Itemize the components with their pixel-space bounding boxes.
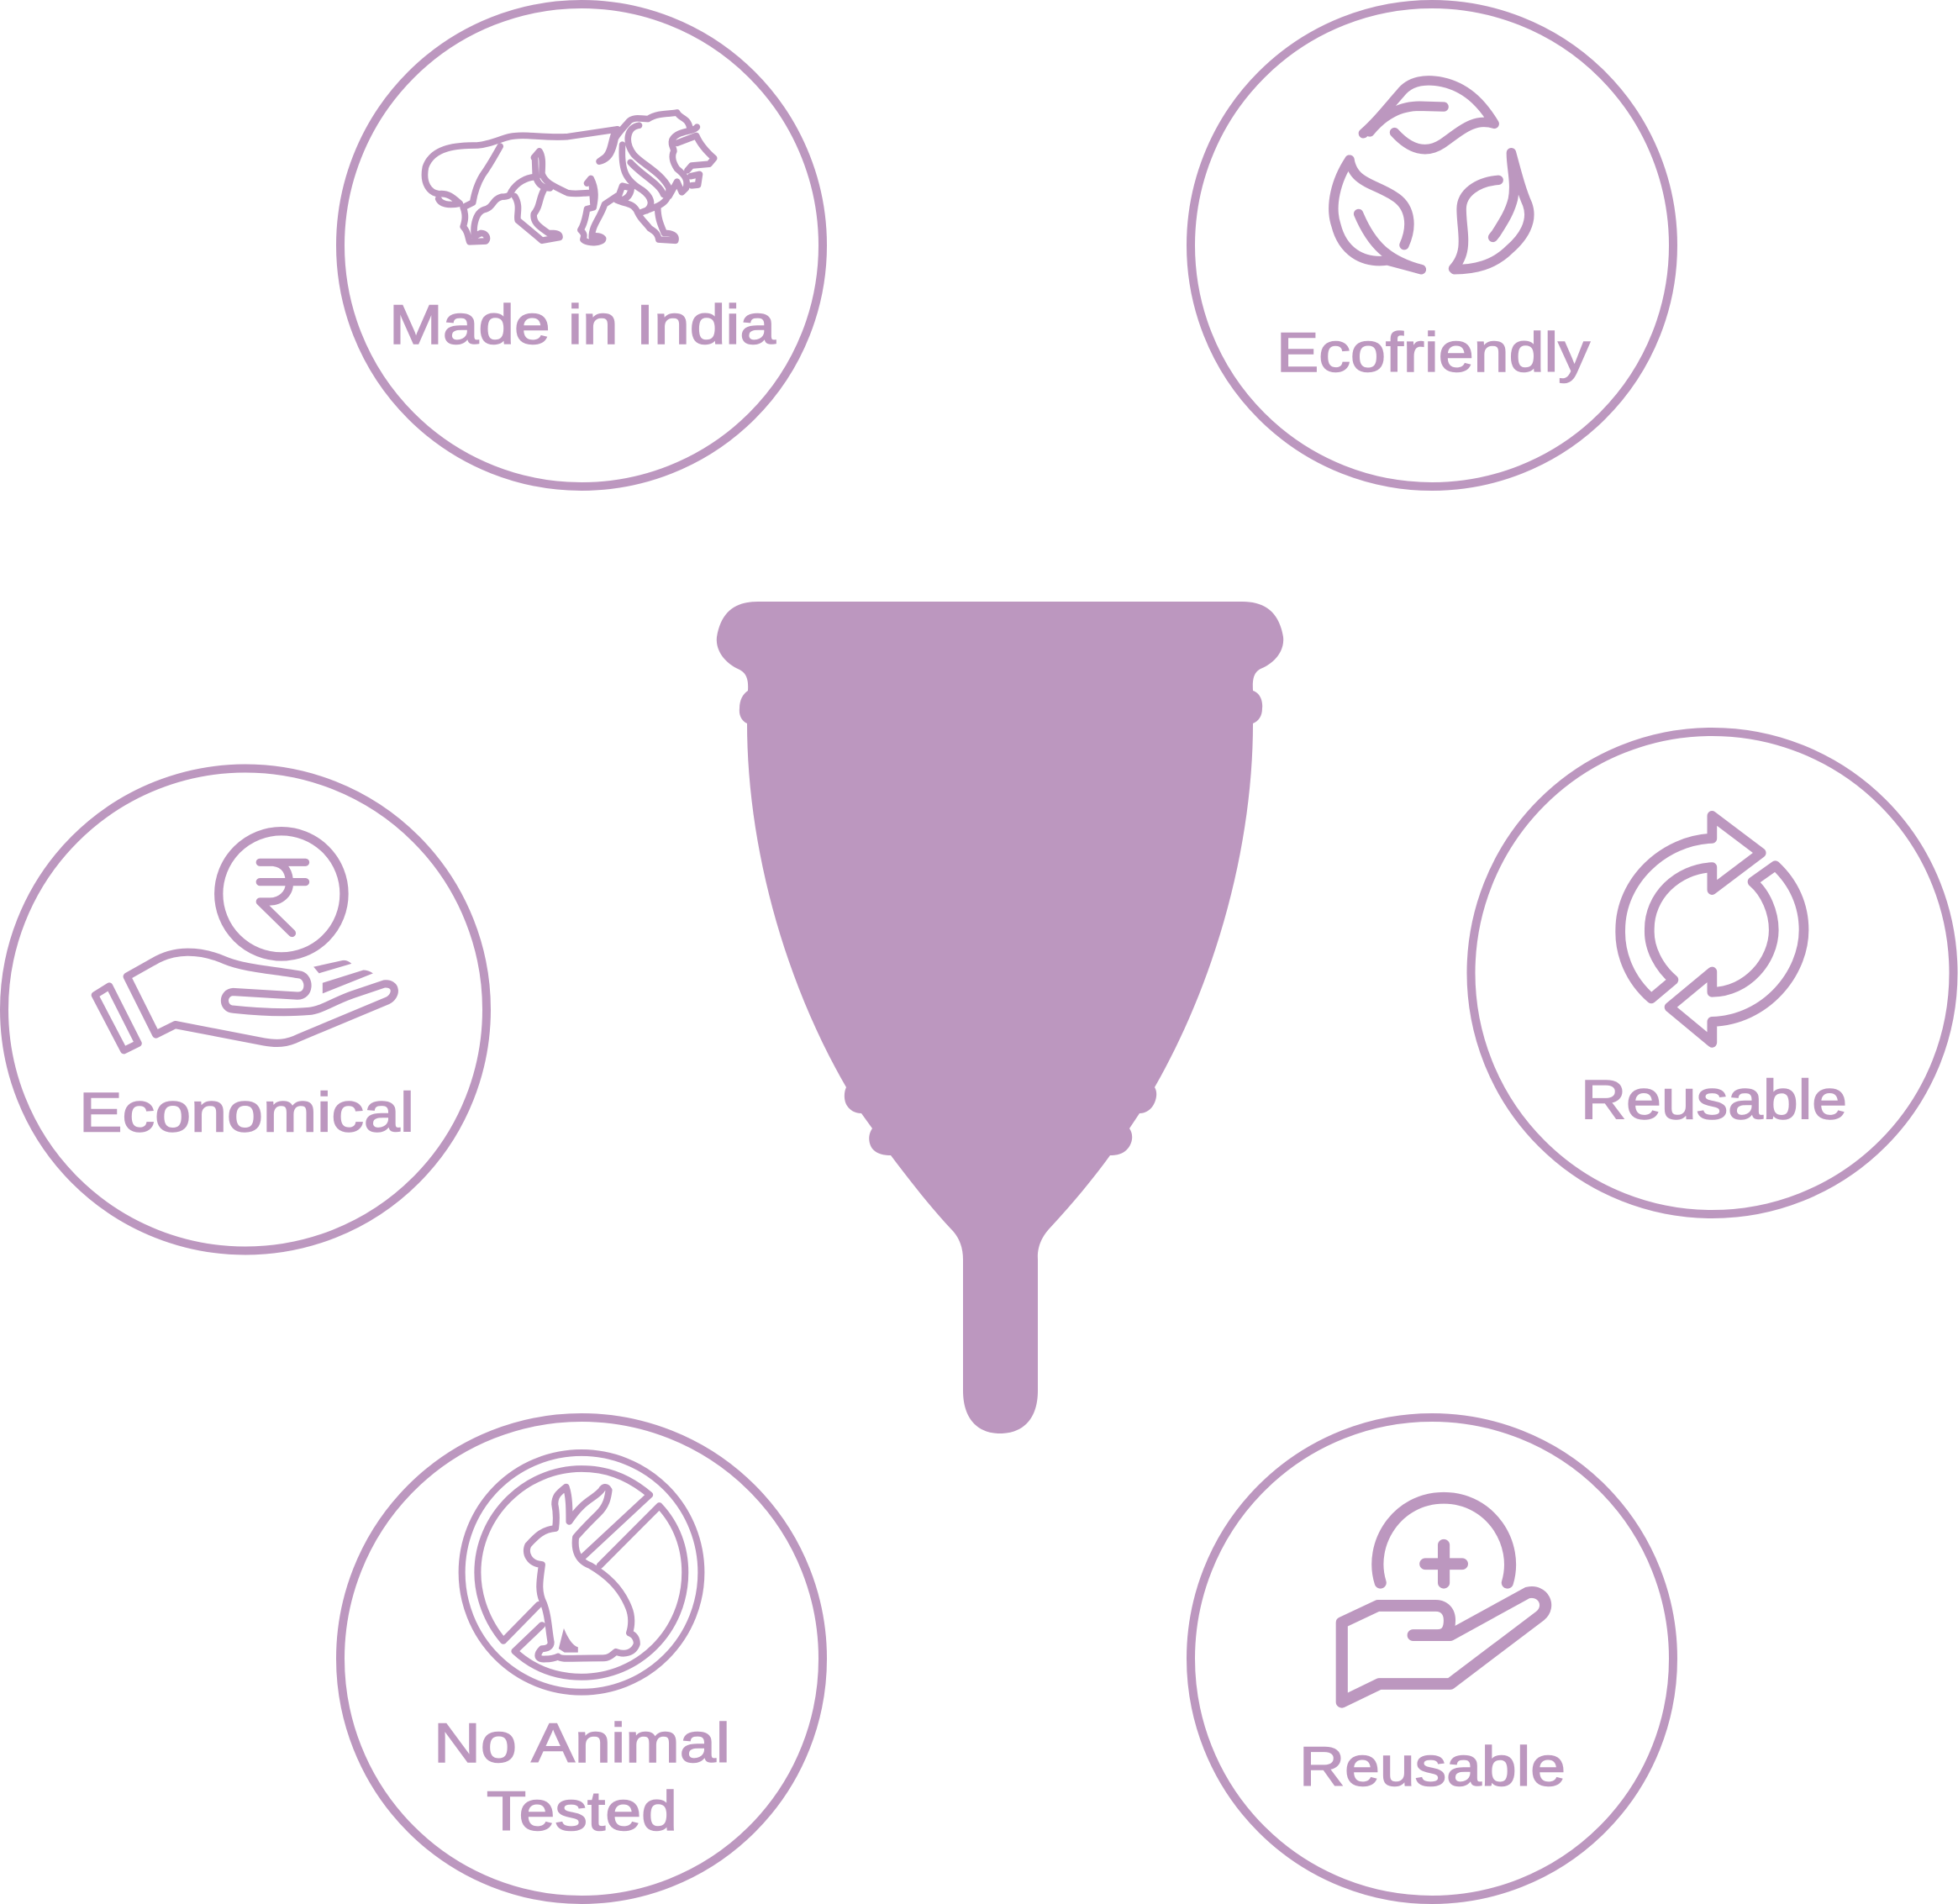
icon: rabbit in prohibition sign: [462, 1453, 701, 1692]
panel: Ecofriendly: [1191, 4, 1673, 487]
icon: outer ring: [462, 1453, 701, 1692]
panel: Reusable (arrows): [1471, 732, 1953, 1214]
icon: rabbit foot: [559, 1628, 578, 1653]
badge ring: [1191, 1417, 1673, 1900]
label: Ecofriendly: Ecofriendly: [1276, 321, 1590, 383]
icon: circular arrows: [1620, 816, 1804, 1043]
badge ring: [340, 4, 823, 487]
badge ring: [1471, 732, 1953, 1214]
icon: rabbit: [527, 1487, 637, 1659]
panel: Made in India: [340, 4, 823, 487]
panel: No Animal Tested: [340, 1417, 823, 1900]
icon: fingers: [313, 960, 373, 993]
icon: hand with rupee coin: [95, 831, 394, 1050]
menstrual cup silhouette: [717, 602, 1283, 1433]
label: Tested: Tested: [487, 1780, 677, 1842]
label: Made in India: Made in India: [389, 293, 776, 355]
icon: cuff: [95, 986, 139, 1050]
icon: rupee symbol: [260, 862, 306, 933]
panel: Reusable (hand): [1191, 1417, 1673, 1900]
badge ring: [340, 1417, 823, 1900]
icon: slashed inner ring: [477, 1469, 685, 1677]
panel: Economical: [4, 768, 487, 1250]
badge ring: [4, 768, 487, 1250]
label: Economical: Economical: [79, 1081, 414, 1143]
label: Reusable: Reusable: [1581, 1069, 1847, 1131]
icon: three recycling leaves: [1334, 81, 1529, 270]
icon: lion: [424, 113, 714, 243]
icon: coin: [218, 831, 344, 956]
label: No Animal: No Animal: [434, 1712, 730, 1774]
icon: open hand: [127, 952, 394, 1043]
label: Reusable: Reusable: [1299, 1735, 1566, 1797]
badge ring: [1191, 4, 1673, 487]
icon: hand holding plus: [1342, 1498, 1545, 1702]
